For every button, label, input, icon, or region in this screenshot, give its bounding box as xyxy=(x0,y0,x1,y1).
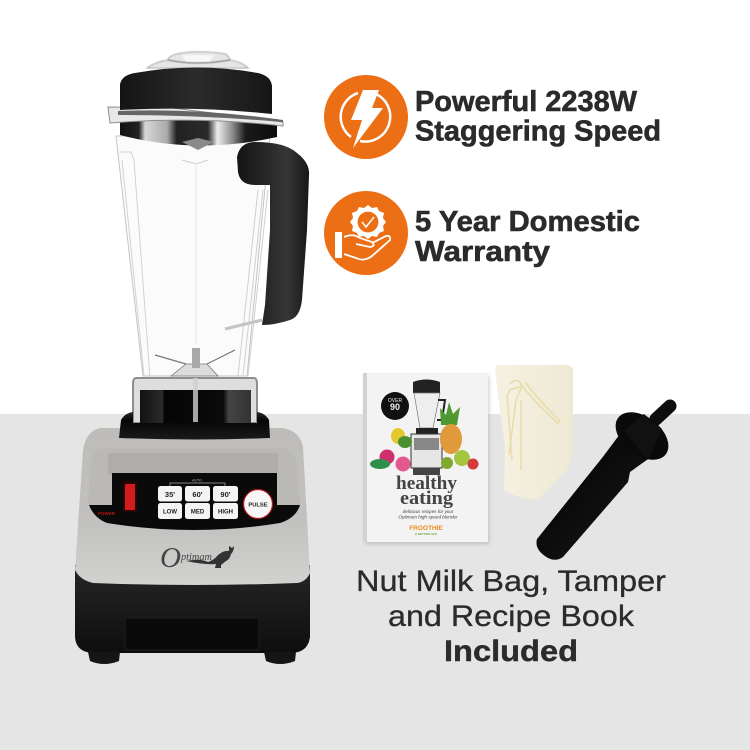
blade assembly xyxy=(155,348,235,376)
book brand xyxy=(409,525,443,536)
book title: eating xyxy=(400,488,454,509)
icon: badge in hand xyxy=(324,191,408,275)
button 35': 35' xyxy=(165,490,175,499)
book title: healthy xyxy=(396,473,457,494)
caption: included accessories xyxy=(356,565,666,668)
button LOW xyxy=(158,503,182,519)
heading: power: Powerful 2238W xyxy=(415,86,638,118)
book subtitle: delicious recipes for your xyxy=(403,509,454,514)
motor base xyxy=(75,565,310,653)
button 35' xyxy=(158,486,182,502)
icon: lightning bolt xyxy=(324,75,408,159)
blender xyxy=(75,52,310,664)
book subtitle: Optimum high-speed blender xyxy=(398,514,458,520)
auto bracket xyxy=(170,478,225,486)
auto bracket: AUTO xyxy=(192,478,202,482)
button 90': 90' xyxy=(220,490,231,499)
button HIGH: HIGH xyxy=(218,510,233,516)
button 60': 60' xyxy=(192,490,203,499)
button HIGH xyxy=(213,503,238,519)
caption: included accessories: and Recipe Book xyxy=(388,600,635,633)
jar seat plinth xyxy=(119,412,270,440)
caption: included accessories: Included xyxy=(444,635,578,668)
book title xyxy=(396,473,457,509)
heading: warranty: 5 Year Domestic xyxy=(415,206,640,238)
book brand: A BETTER LIFE xyxy=(415,532,437,536)
jar handle xyxy=(237,142,309,325)
book brand: FROOTHIE xyxy=(409,525,443,532)
power label: POWER xyxy=(98,511,116,516)
control panel xyxy=(89,473,300,530)
collar of the jar xyxy=(133,378,257,423)
book blender illustration xyxy=(411,380,445,475)
heading: power xyxy=(415,86,661,148)
book badge xyxy=(381,392,409,420)
brand logo: ptimam xyxy=(180,551,212,563)
feature: warranty xyxy=(324,191,640,275)
heading: warranty: Warranty xyxy=(415,236,550,268)
background: grey lower band xyxy=(0,414,750,750)
right foot xyxy=(264,652,296,664)
button PULSE xyxy=(244,490,272,518)
book badge: OVER xyxy=(388,398,402,404)
nut milk bag xyxy=(495,365,573,500)
book subtitle xyxy=(398,509,458,520)
brand logo: O xyxy=(160,542,181,574)
button MED xyxy=(185,503,210,519)
shoulder inset xyxy=(108,453,278,475)
jar rim and dark band xyxy=(108,107,283,150)
button LOW: LOW xyxy=(163,510,177,516)
book fruit illustration xyxy=(370,402,478,472)
jar lid clear cap xyxy=(147,52,248,68)
left foot xyxy=(88,652,120,664)
feature: power xyxy=(324,75,661,159)
caption: included accessories: Nut Milk Bag, Tamper xyxy=(356,565,666,598)
jar body xyxy=(116,136,270,378)
book badge: 90 xyxy=(390,402,400,412)
tamper upper section xyxy=(624,414,662,460)
button 90' xyxy=(213,486,238,502)
jar lid xyxy=(120,68,272,114)
rim band xyxy=(118,110,283,122)
motor body xyxy=(75,428,310,585)
tamper shaft xyxy=(536,430,658,560)
tamper tip xyxy=(656,406,670,419)
power switch xyxy=(123,481,137,512)
tamper xyxy=(536,403,677,560)
base slot xyxy=(125,618,259,650)
brand logo xyxy=(160,542,234,574)
heading: warranty xyxy=(415,206,640,268)
button 60' xyxy=(185,486,210,502)
heading: power: Staggering Speed xyxy=(415,116,661,148)
tamper collar xyxy=(607,403,677,469)
button PULSE: PULSE xyxy=(248,502,268,508)
motor top shoulder xyxy=(88,448,300,505)
button MED: MED xyxy=(191,510,205,516)
recipe book xyxy=(363,373,489,544)
